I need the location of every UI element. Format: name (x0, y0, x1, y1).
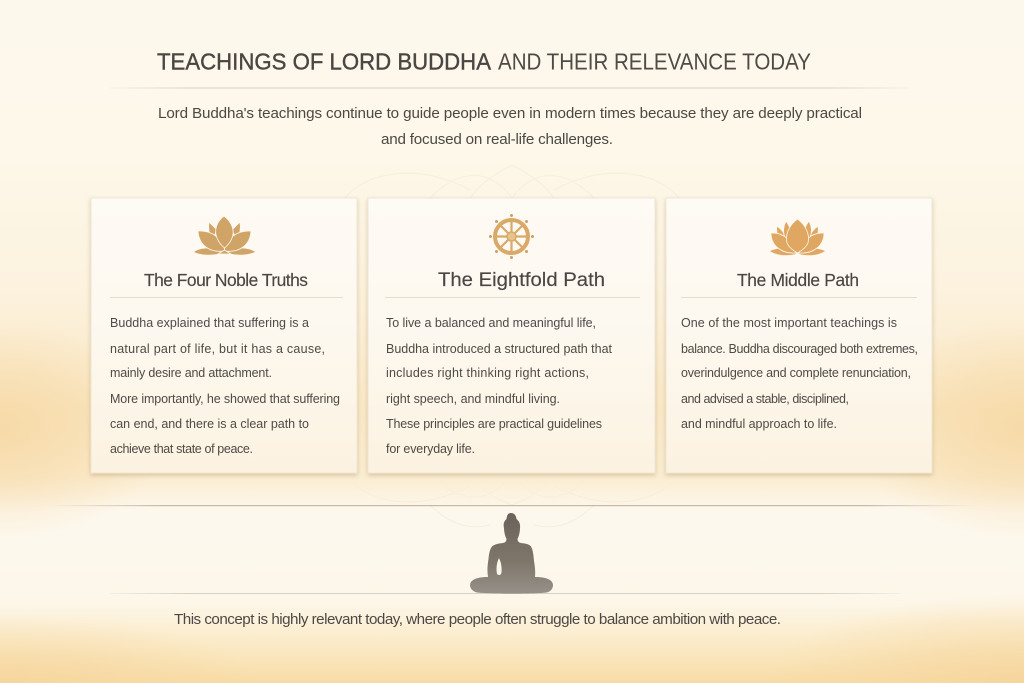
panel: The Eightfold Path (368, 198, 655, 473)
body text: overindulgence and complete renunciation, (681, 366, 911, 380)
intro text (158, 105, 862, 148)
body text: Buddha introduced a structured path that (386, 342, 613, 356)
panel: The Middle Path (666, 198, 932, 473)
body text (386, 316, 613, 456)
closing statement: This concept is highly relevant today, where people often struggle to balance ambition with peace. (174, 611, 781, 628)
body text: mainly desire and attachment. (110, 366, 272, 380)
body text: can end, and there is a clear path to (110, 417, 309, 431)
intro text: Lord Buddha's teachings continue to guide people even in modern times because they are deeply practical (158, 105, 862, 122)
body text: Buddha explained that suffering is a (110, 316, 309, 330)
body text: achieve that state of peace. (110, 442, 253, 456)
title (157, 48, 811, 74)
body text: One of the most important teachings is (681, 316, 897, 330)
icon: lotus (769, 219, 826, 256)
body text (681, 316, 918, 431)
body text: right speech, and mindful living. (386, 392, 560, 406)
body text (110, 316, 340, 456)
body text: and advised a stable, disciplined, (681, 392, 849, 406)
title: AND THEIR RELEVANCE TODAY (498, 48, 811, 74)
body text: for everyday life. (386, 442, 475, 456)
heading: The Eightfold Path (438, 270, 605, 291)
body text: To live a balanced and meaningful life, (386, 316, 596, 330)
body text: includes right thinking right actions, (386, 366, 589, 380)
title: TEACHINGS OF LORD BUDDHA (157, 48, 491, 74)
icon: meditating Buddha (470, 513, 553, 594)
body text: These principles are practical guidelines (386, 417, 602, 431)
body text: natural part of life, but it has a cause, (110, 342, 325, 356)
intro text: and focused on real-life challenges. (381, 131, 613, 148)
body text: and mindful approach to life. (681, 417, 837, 431)
heading: The Middle Path (737, 270, 859, 290)
icon: lotus (193, 216, 256, 255)
panel: The Four Noble Truths (91, 198, 357, 473)
body text: More importantly, he showed that suffering (110, 392, 340, 406)
mandala watermark (345, 165, 679, 527)
icon: dharma wheel (489, 214, 534, 259)
heading: The Four Noble Truths (144, 270, 308, 290)
body text: balance. Buddha discouraged both extremes, (681, 342, 918, 356)
